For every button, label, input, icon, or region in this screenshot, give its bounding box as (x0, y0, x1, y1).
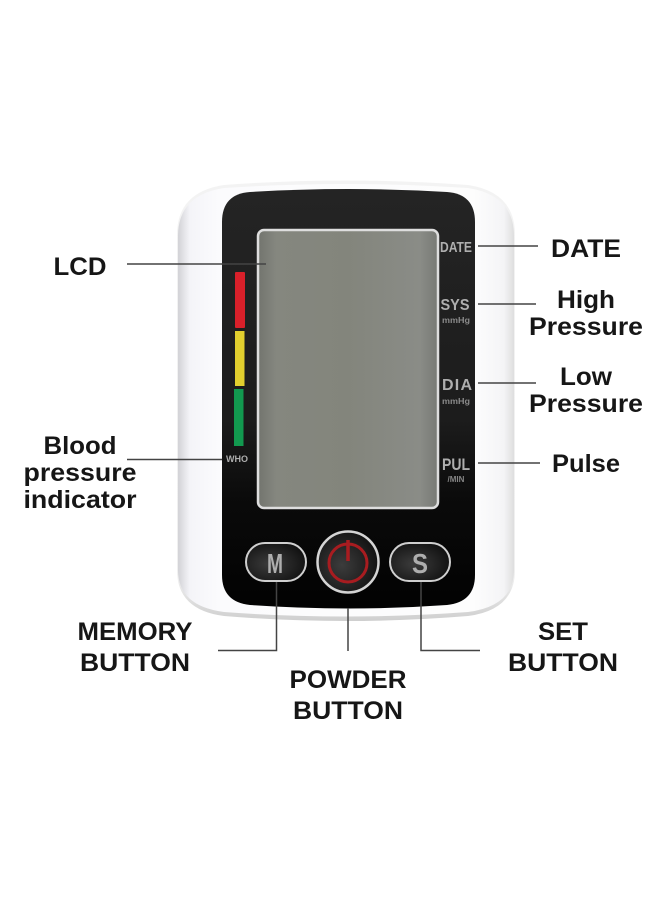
label: Low Pressure: Low (560, 363, 613, 391)
leader lines (127, 246, 540, 651)
label: Pulse: Pulse (552, 450, 620, 478)
label: LCD: LCD (54, 253, 106, 281)
label: Blood pressure indicator (24, 432, 137, 514)
black front panel (222, 189, 475, 608)
label: DATE: DATE (551, 235, 621, 263)
label: High Pressure: High (557, 286, 615, 314)
device body (177, 180, 515, 621)
label: High Pressure (529, 286, 643, 341)
panel labels: PUL (442, 455, 470, 474)
panel labels: mmHg (442, 316, 470, 325)
LCD screen (258, 230, 438, 508)
panel labels: mmHg (442, 397, 470, 406)
panel labels: DIA (442, 377, 472, 394)
label: MEMORY BUTTON: BUTTON (80, 649, 190, 677)
label: SET BUTTON (508, 618, 618, 677)
panel labels: SYS (440, 297, 470, 314)
label: MEMORY BUTTON: MEMORY (78, 618, 193, 646)
panel labels: DATE (440, 239, 472, 256)
label: High Pressure: Pressure (529, 313, 643, 341)
label: SET BUTTON: SET (538, 618, 588, 646)
panel labels: /MIN (448, 475, 465, 484)
label: Blood pressure indicator: indicator (24, 486, 137, 514)
label: POWDER BUTTON: BUTTON (293, 697, 403, 725)
label: SET BUTTON: BUTTON (508, 649, 618, 677)
label: POWDER BUTTON: POWDER (290, 666, 406, 694)
blood pressure indicator bars (234, 272, 245, 446)
button: power (318, 532, 378, 592)
label: Blood pressure indicator: Blood (44, 432, 116, 460)
button: S: S (412, 548, 428, 579)
label: Low Pressure (529, 363, 643, 418)
label: POWDER BUTTON (290, 666, 406, 725)
label: MEMORY BUTTON (78, 618, 193, 677)
button: M: M (267, 548, 283, 579)
button: S (390, 543, 450, 581)
WHO label: WHO (226, 454, 248, 464)
button: M (246, 543, 306, 581)
label: Blood pressure indicator: pressure (24, 459, 137, 487)
panel labels (440, 239, 472, 484)
label: Low Pressure: Pressure (529, 390, 643, 418)
